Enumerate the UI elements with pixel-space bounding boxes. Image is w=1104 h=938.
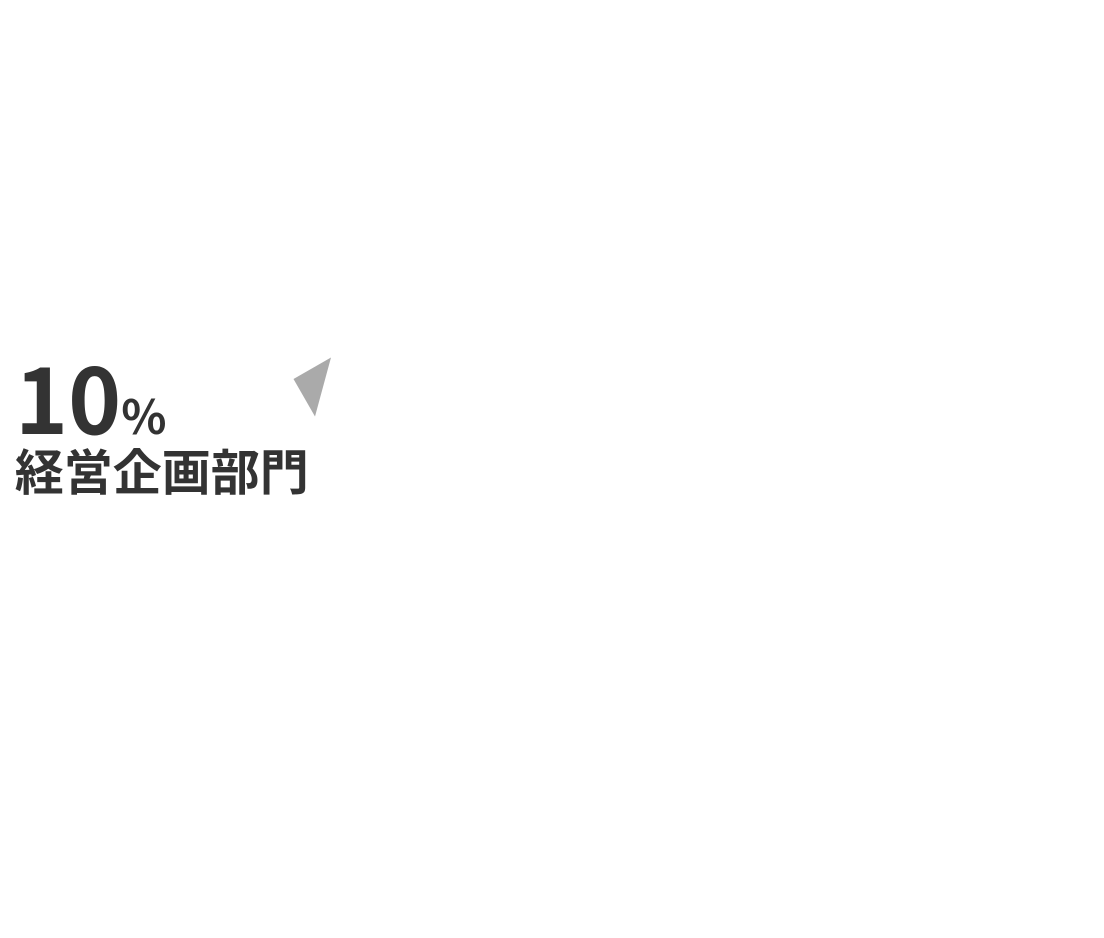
label: department name: 経営企画部門 [15,434,309,505]
pie segment: gray wedge [294,358,331,416]
value: 10 percent: 10% [15,330,166,460]
